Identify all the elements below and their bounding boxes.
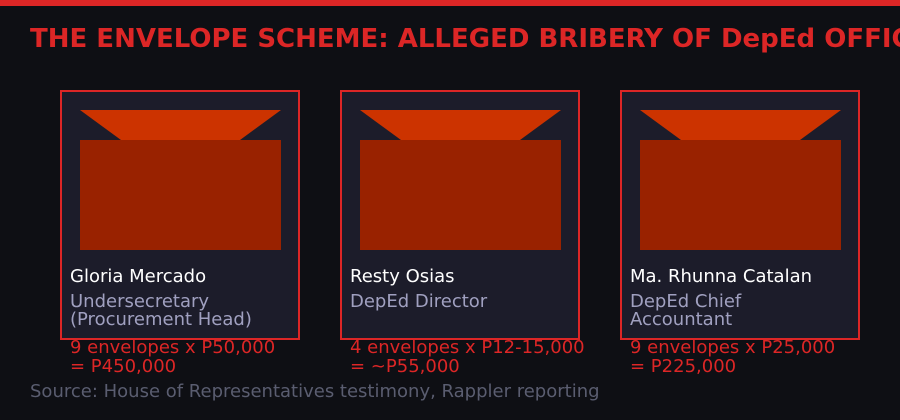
source note: Source: House of Representatives testimony, Rappler reporting — [30, 381, 600, 402]
role: DepEd Director — [350, 291, 488, 312]
amount: = P450,000 — [70, 356, 176, 377]
role: DepEd Chief — [630, 291, 741, 312]
role: (Procurement Head) — [70, 309, 252, 330]
name: Resty Osias — [350, 266, 455, 287]
top accent bar — [0, 0, 900, 6]
amount: 9 envelopes x P25,000 — [630, 337, 835, 358]
icon: envelope — [640, 110, 841, 250]
amount: 9 envelopes x P50,000 — [70, 337, 275, 358]
icon: envelope — [80, 110, 281, 250]
name: Ma. Rhunna Catalan — [630, 266, 812, 287]
role: Undersecretary — [70, 291, 209, 312]
role: Accountant — [630, 309, 732, 330]
amount: 4 envelopes x P12-15,000 — [350, 337, 585, 358]
card: Ma. Rhunna Catalan — [621, 91, 859, 377]
amount: = P225,000 — [630, 356, 736, 377]
amount: = ~P55,000 — [350, 356, 460, 377]
card: Resty Osias — [341, 91, 585, 377]
icon: envelope — [360, 110, 561, 250]
card: Gloria Mercado — [61, 91, 299, 377]
name: Gloria Mercado — [70, 266, 206, 287]
